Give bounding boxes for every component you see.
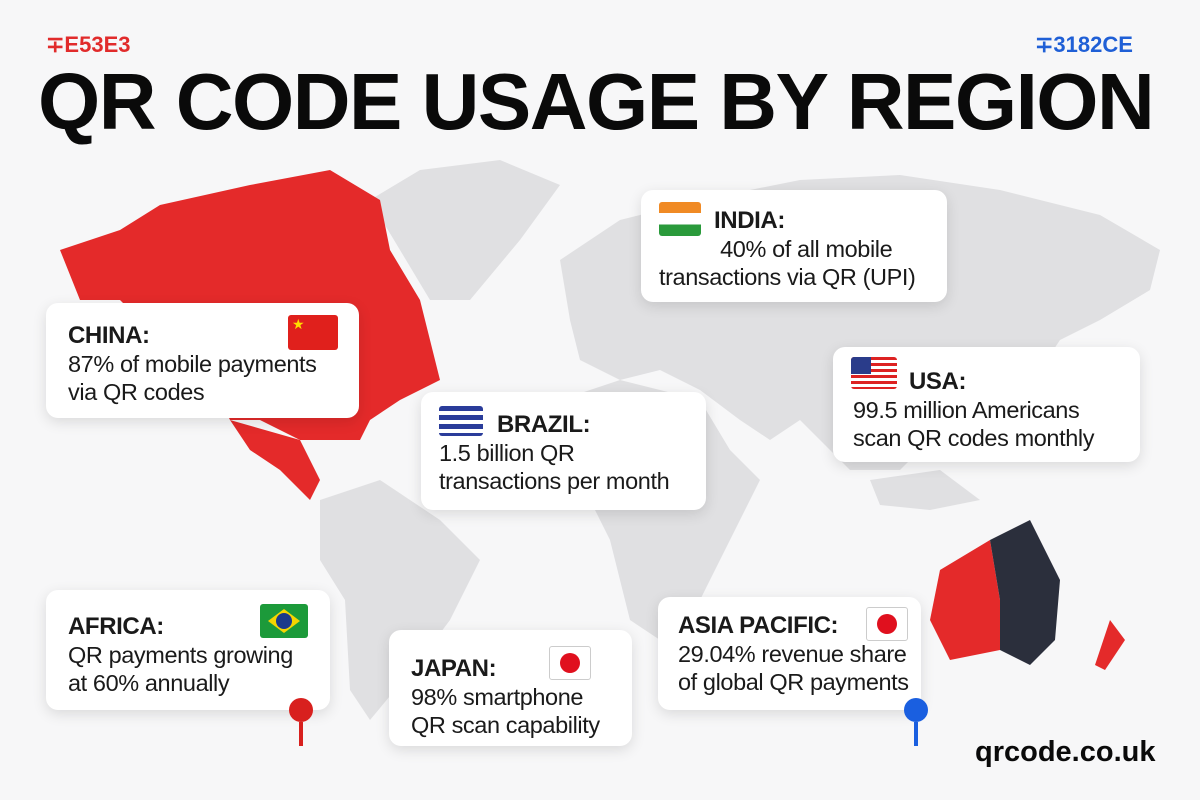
card: usa: USA: — [909, 368, 966, 395]
flag: japan — [866, 607, 908, 641]
card: asia pacific: 29.04% revenue share — [678, 641, 906, 667]
card: japan: QR scan capability — [411, 712, 600, 738]
flag: china: ★ — [292, 316, 304, 332]
card: india: INDIA: — [714, 207, 785, 234]
pin: red — [289, 698, 313, 746]
flag: japan — [549, 646, 591, 680]
card: asia pacific: of global QR payments — [678, 669, 909, 695]
card: china — [46, 303, 359, 418]
footer url: qrcode.co.uk — [975, 736, 1156, 768]
label: red hex: ∓E53E3 — [46, 32, 130, 57]
flag: usa — [851, 357, 897, 389]
card: asia pacific — [658, 597, 921, 710]
title: QR CODE USAGE BY REGION — [38, 57, 1153, 146]
card: brazil: BRAZIL: — [497, 411, 590, 438]
flag: india — [659, 202, 701, 236]
card: india: 40% of all mobile — [720, 236, 892, 262]
label: blue hex: ∓3182CE — [1035, 32, 1133, 57]
card: japan: 98% smartphone — [411, 684, 583, 710]
card: usa: scan QR codes monthly — [853, 425, 1094, 451]
card: japan: JAPAN: — [411, 655, 496, 682]
pin: blue — [904, 698, 928, 746]
card: india — [641, 190, 947, 302]
card: brazil: 1.5 billion QR — [439, 440, 574, 466]
card: china: 87% of mobile payments — [68, 351, 317, 377]
flag: brazil — [260, 604, 308, 638]
flag: brazil (usa-like) — [439, 406, 483, 436]
card: africa: at 60% annually — [68, 670, 229, 696]
card: india: transactions via QR (UPI) — [659, 264, 915, 290]
card: china: CHINA: — [68, 322, 150, 349]
card: brazil: transactions per month — [439, 468, 669, 494]
card: usa: 99.5 million Americans — [853, 397, 1079, 423]
card: china: via QR codes — [68, 379, 204, 405]
flag: china — [288, 315, 338, 350]
card: asia pacific: ASIA PACIFIC: — [678, 612, 838, 639]
card: brazil — [421, 392, 706, 510]
card: africa — [46, 590, 330, 710]
card: japan — [389, 630, 632, 746]
card: usa — [833, 347, 1140, 462]
card: africa: QR payments growing — [68, 642, 293, 668]
card: africa: AFRICA: — [68, 613, 164, 640]
